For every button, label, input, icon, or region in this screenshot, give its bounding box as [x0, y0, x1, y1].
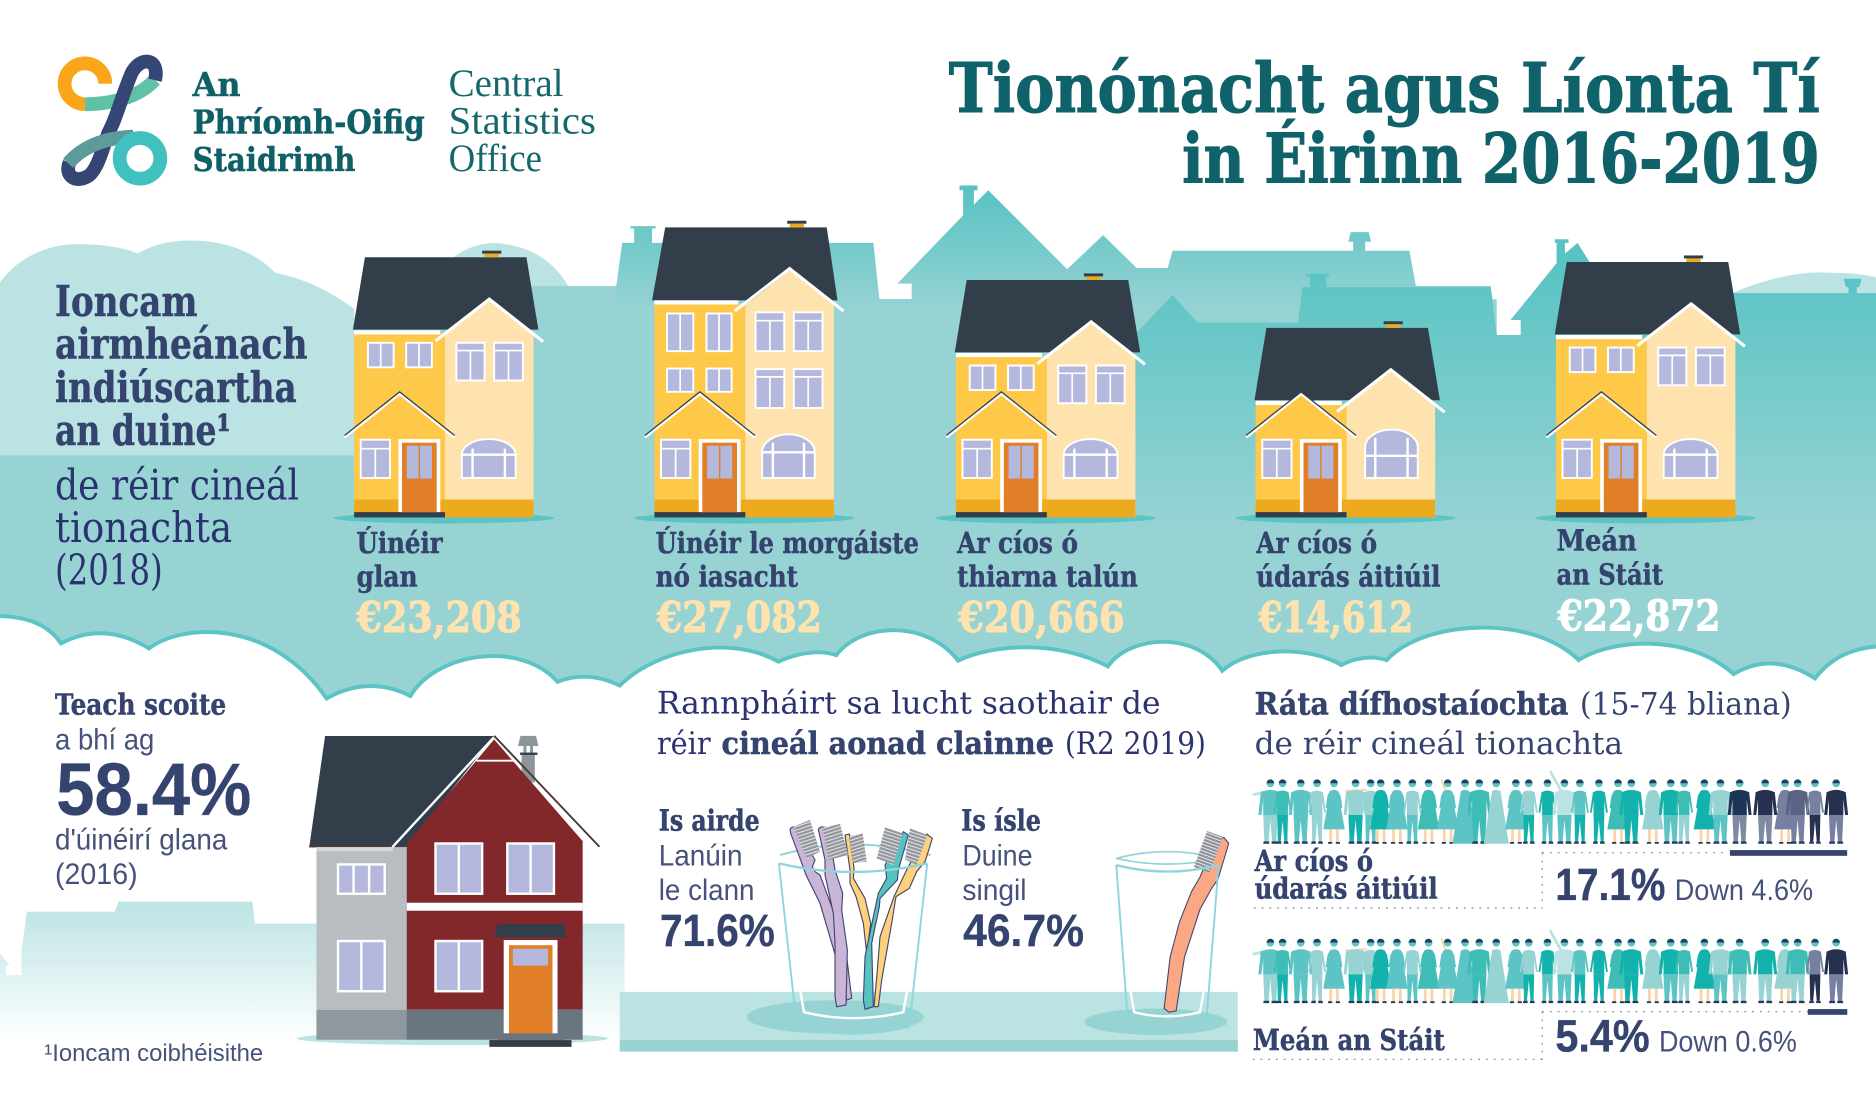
heading: labour force participation: Rannpháirt sa lucht saothair de [657, 685, 1161, 721]
text block: highest participation [659, 804, 775, 956]
stat: local authority renters [1254, 844, 1847, 910]
logo text: Irish name [192, 66, 425, 179]
people row: local authority renters [1254, 772, 1848, 844]
heading: labour force participation: (R2 2019) [1065, 726, 1206, 762]
income label: rented from landlord: thiarna talún [957, 559, 1138, 593]
income label: owner with mortgage: Úinéir le morgáiste [656, 526, 919, 560]
heading: unemployment rate: de réir cineál tionachta [1255, 726, 1623, 762]
text block: school house stat [55, 687, 251, 891]
income label: rented from landlord [956, 526, 1138, 642]
income label: rented from local authority: €14,612 [1258, 593, 1413, 642]
text block: lowest participation: 46.7% [963, 905, 1084, 956]
text block: school house stat: 58.4% [56, 748, 251, 831]
income label: rented from local authority: údarás áitiúil [1256, 559, 1441, 593]
income label: rented from landlord: €20,666 [957, 593, 1125, 642]
logo text: Irish name: Phríomh-Oifig [193, 104, 425, 142]
income label: rented from local authority [1255, 526, 1441, 642]
logo text: English name: Statistics [449, 99, 596, 143]
title [949, 49, 1820, 199]
logo text: English name: Office [449, 136, 542, 180]
logo text: English name [449, 61, 596, 180]
text block: lowest participation: singil [962, 874, 1027, 907]
heading: income by tenure: tionachta [55, 503, 232, 552]
text block: lowest participation [961, 804, 1084, 956]
stat: state average: Down 0.6% [1659, 1026, 1797, 1059]
text block: school house stat: (2016) [55, 858, 138, 891]
text block: highest participation: Lanúin [659, 840, 743, 873]
income label: state average [1557, 523, 1720, 641]
stat: local authority renters: údarás áitiúil [1255, 872, 1438, 906]
text block: school house stat: Teach scoite [55, 687, 226, 721]
text block: lowest participation: Is ísle [961, 804, 1041, 838]
footnote: ¹Ioncam coibhéisithe [44, 1040, 263, 1067]
house: state average [1536, 255, 1756, 523]
income label: outright owner: glan [357, 559, 418, 593]
house: rented from local authority [1235, 321, 1455, 523]
heading: unemployment rate: (15-74 bliana) [1580, 686, 1792, 722]
logo text: Irish name: An [192, 66, 240, 104]
house: rented from landlord [936, 273, 1156, 523]
logo text: Irish name: Staidrimh [193, 141, 355, 179]
text block: lowest participation: Duine [962, 840, 1033, 873]
faded skyline bottom left [0, 902, 625, 1043]
stat: local authority renters: Ar cíos ó [1254, 844, 1373, 878]
income label: state average: €22,872 [1557, 592, 1720, 641]
heading: unemployment rate [1255, 686, 1792, 762]
text block: highest participation: Is airde [659, 804, 760, 838]
house: outright owner [334, 251, 554, 523]
income label: rented from local authority: Ar cíos ó [1255, 526, 1377, 560]
heading: income by tenure: Ioncam [55, 277, 197, 326]
income label: outright owner: €23,208 [356, 593, 522, 642]
heading: income by tenure: airmheánach [55, 320, 307, 369]
heading: income by tenure: de réir cineál [55, 461, 299, 510]
logo [65, 62, 160, 179]
skyline band [0, 185, 1876, 718]
text block: school house stat: d'úinéirí glana [55, 823, 228, 856]
glass with five toothbrushes [747, 820, 932, 1034]
stat: state average: Meán an Stáit [1253, 1023, 1445, 1057]
stat: state average [1253, 1009, 1847, 1062]
text block: school house stat: a bhí ag [55, 723, 154, 756]
income label: outright owner [356, 526, 522, 642]
heading: unemployment rate: Ráta dífhostaíochta [1255, 686, 1569, 722]
house: owner with mortgage [634, 221, 854, 523]
income label: owner with mortgage: €27,082 [656, 593, 822, 642]
text block: highest participation: le clann [659, 874, 754, 907]
income label: state average: Meán [1557, 523, 1637, 557]
heading: income by tenure: indiúscartha [55, 363, 297, 412]
heading: income by tenure: an duine¹ [55, 406, 231, 455]
stat: local authority renters: Down 4.6% [1675, 874, 1813, 907]
shelf [620, 992, 1238, 1052]
heading: labour force participation: cineál aonad clainne [721, 726, 1054, 762]
logo text: English name: Central [449, 61, 564, 105]
white cloud edge [0, 616, 1876, 1095]
income label: owner with mortgage: nó iasacht [656, 559, 799, 593]
heading: labour force participation [657, 685, 1206, 762]
heading: income by tenure [55, 277, 307, 595]
income label: owner with mortgage [656, 526, 919, 642]
big red house [297, 736, 608, 1047]
heading: labour force participation: réir [657, 726, 711, 762]
income label: outright owner: Úinéir [357, 526, 443, 560]
people row: state average [1254, 931, 1848, 1003]
income label: state average: an Stáit [1557, 558, 1664, 592]
glass with one toothbrush [1084, 831, 1229, 1035]
stat: state average: 5.4% [1555, 1011, 1650, 1062]
income label: rented from landlord: Ar cíos ó [956, 526, 1078, 560]
text block: highest participation: 71.6% [660, 905, 775, 956]
stat: local authority renters: 17.1% [1555, 859, 1665, 910]
heading: income by tenure: (2018) [55, 546, 163, 595]
